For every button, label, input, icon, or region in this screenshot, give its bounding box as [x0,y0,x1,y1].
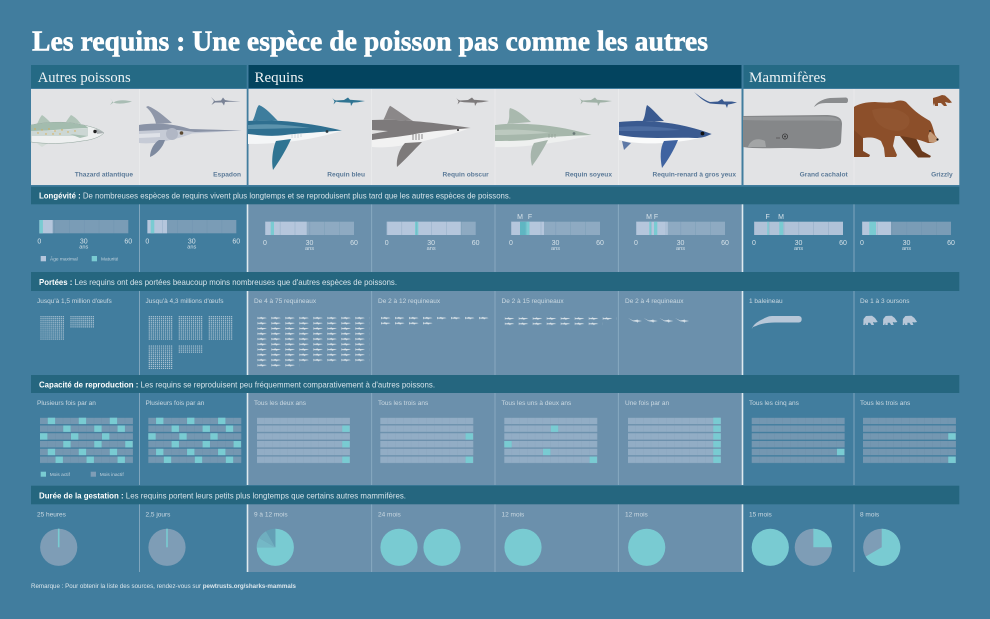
bar: grand cachalot: F [766,214,770,221]
gestation: labels: 8 mois [860,512,880,518]
portées: labels: De 2 à 4 requineaux [625,298,684,305]
bar: grizzly: 30 [903,240,910,247]
bar: requin soyeux: 0 [509,240,513,247]
portées: labels: De 1 à 3 oursons [860,298,910,305]
eggs: thazard atlantique [40,316,94,340]
section band: capacité de reproduction [31,375,959,393]
bar: requin soyeux: ans [551,246,560,252]
mini requin-renard [694,92,737,108]
bar: grand cachalot: 30 [795,240,802,247]
pies: requin obscur [380,529,461,566]
bar: requin-renard: 30 [677,240,684,247]
bar: espadon [145,220,240,250]
legend: reproduction [41,472,124,478]
pups: requin-renard [628,318,689,323]
bar: requin soyeux [509,214,604,252]
pups: requin bleu [257,316,369,369]
pie: requin soyeux [504,529,542,566]
bar: requin obscur [385,222,480,252]
bar: grizzly [860,222,955,252]
gestation: labels [37,512,880,518]
bar: grizzly: 0 [860,240,864,247]
pups: requin obscur [381,316,493,327]
section band: capacité de reproduction: Capacité de reproduction : Les requins se reproduisent peu fréquemment comparativement à d'autres poissons. [39,380,435,390]
bar: requin obscur: 60 [472,240,480,247]
illustration: espadon [139,106,242,157]
bar: requin-renard [634,214,729,252]
species names: Requin obscur [443,172,489,179]
bar: thazard atlantique [37,220,132,250]
header: requins [248,65,742,88]
reproduction: labels: Une fois par an [625,400,669,407]
header: autres poissons [31,65,247,88]
reproduction: labels: Tous les trois ans [378,400,429,407]
mini requin obscur [456,98,489,106]
bar: requin-renard: 0 [634,240,638,247]
calendar: espadon [148,418,241,464]
panel backgrounds: requins [248,204,742,572]
eggs: espadon [148,316,233,369]
legend: longévité: Maturité [101,257,119,263]
bar: requin bleu: 60 [350,240,358,247]
gestation: labels: 25 heures [37,512,67,518]
illustration: requin-renard à gros yeux [619,105,712,168]
legend: reproduction: Mois actif [50,472,71,478]
bar: requin soyeux: F [528,214,532,221]
section band: portées [31,272,959,291]
species names [75,172,953,179]
bar: grizzly: 60 [947,240,955,247]
legend: longévité: Âge maximal [50,256,78,263]
bar: espadon: 0 [145,238,149,245]
bar: grand cachalot: 60 [839,240,847,247]
bar: requin obscur: 30 [427,240,435,247]
bar: requin bleu: 0 [263,240,267,247]
calendar: grizzly [863,418,956,464]
header: mammifères: Mammifères [749,70,826,86]
portées: labels: De 4 à 75 requineaux [254,298,317,305]
bar: espadon: 30 [188,238,196,245]
section band: portées: Portées : Les requins ont des portées beaucoup moins nombreuses que d'autres espèces de poissons. [39,277,397,287]
species names: Requin soyeux [565,172,612,179]
longévité charts [37,214,955,263]
mini cachalot [814,98,848,107]
bar: grand cachalot: ans [794,246,803,252]
pies: grand cachalot [752,529,832,566]
gestation: labels: 15 mois [749,512,773,518]
bar: thazard atlantique: 0 [37,238,41,245]
bar: thazard atlantique: ans [79,244,89,250]
bar: requin bleu: ans [305,246,314,252]
legend: longévité [41,256,119,263]
bar: requin bleu: 30 [306,240,313,247]
bar: requin soyeux: M [517,214,523,221]
species names: Grizzly [931,172,953,179]
bar: espadon: 60 [232,238,240,245]
mini requin bleu [332,98,365,106]
bar: grand cachalot [752,214,847,252]
section band: longévité [31,187,959,204]
reproduction: labels: Plusieurs fois par an [37,400,96,407]
pie: thazard atlantique [40,529,77,566]
bar: requin obscur: 0 [385,240,389,247]
bar: requin-renard: F [654,214,658,221]
bar: grand cachalot: 0 [752,240,756,247]
column headers [31,65,959,88]
species names: Requin-renard à gros yeux [652,172,736,179]
calendar: requin soyeux [504,418,597,464]
reproduction: labels [37,400,911,407]
header: requins: Requins [254,70,304,86]
gestation: labels: 12 mois [625,512,649,518]
calendar: grand cachalot [752,418,845,464]
header: mammifères [744,65,959,88]
illustration: requin soyeux [495,108,592,166]
gestation: labels: 2,5 jours [146,512,171,518]
mini requin soyeux [579,98,612,106]
reproduction: labels: Tous les cinq ans [749,400,800,407]
bar: requin-renard: ans [676,246,685,252]
reproduction: labels: Plusieurs fois par an [146,400,205,407]
gestation: labels: 24 mois [378,512,402,518]
bar: espadon: ans [187,244,197,250]
portées: labels: Jusqu'à 4,3 millions d'œufs [146,298,224,305]
bar: thazard atlantique: 60 [124,238,132,245]
portées: labels: 1 baleineau [749,298,783,305]
mini espadon [211,97,241,106]
portées: labels: De 2 à 15 requineaux [502,298,564,305]
illustration: thazard atlantique [31,115,104,147]
column dividers [140,204,854,572]
mini thazard [110,98,132,105]
illustration: grand cachalot [743,115,842,149]
calendar: thazard atlantique [40,418,133,464]
oursons [863,316,917,325]
portées: labels [37,298,910,305]
pups: requin soyeux [505,317,617,328]
pie: requin bleu [257,529,294,566]
illustration: requin obscur [372,106,471,167]
portées: labels: De 2 à 12 requineaux [378,298,441,305]
illustration: grizzly [854,100,939,158]
baleineau [752,316,802,329]
header: autres poissons: Autres poissons [38,70,131,86]
pie: grizzly [863,529,900,566]
footnote: Remarque : Pour obtenir la liste des sources, rendez-vous sur pewtrusts.org/sharks-mammals [31,583,296,590]
bar: requin obscur: ans [427,246,436,252]
calendar: requin-renard [628,418,721,464]
bar: thazard atlantique: 30 [80,238,88,245]
bar: grand cachalot: M [778,214,784,221]
title: Les requins : Une espèce de poisson pas comme les autres [32,27,708,58]
species names: Requin bleu [327,172,365,179]
portées: labels: Jusqu'à 1,5 million d'œufs [37,298,112,305]
mini grizzly [933,95,952,106]
gestation: labels: 12 mois [502,512,525,518]
section band: durée de la gestation: Durée de la gestation : Les requins portent leurs petits plus longtemps que certains autres mammifères. [39,490,406,500]
species names: Thazard atlantique [75,172,133,179]
species names: Grand cachalot [800,172,848,179]
bar: requin-renard: 60 [721,240,729,247]
pie: requin-renard [628,529,665,566]
section band: longévité: Longévité : De nombreuses espèces de requins vivent plus longtemps et se reproduisent plus tard que les autres espèces de poissons. [39,190,511,200]
section band: durée de la gestation [31,486,959,504]
bar: requin bleu [263,222,358,252]
bar: requin soyeux: 30 [552,240,559,247]
bar: requin soyeux: 60 [596,240,604,247]
reproduction: labels: Tous les uns à deux ans [502,400,572,407]
bar: grizzly: ans [902,246,911,252]
calendar: requin obscur [380,418,473,464]
bar: requin-renard: M [646,214,652,221]
calendar: requin bleu [257,418,350,464]
legend: reproduction: Mois inactif [100,472,124,478]
species names: Espadon [213,172,241,179]
pie: espadon [148,529,186,566]
illustration: requin bleu [248,105,342,170]
gestation: labels: 9 à 12 mois [254,512,288,518]
reproduction: labels: Tous les trois ans [860,400,911,407]
illustration strip [31,89,959,185]
reproduction: labels: Tous les deux ans [254,400,307,407]
